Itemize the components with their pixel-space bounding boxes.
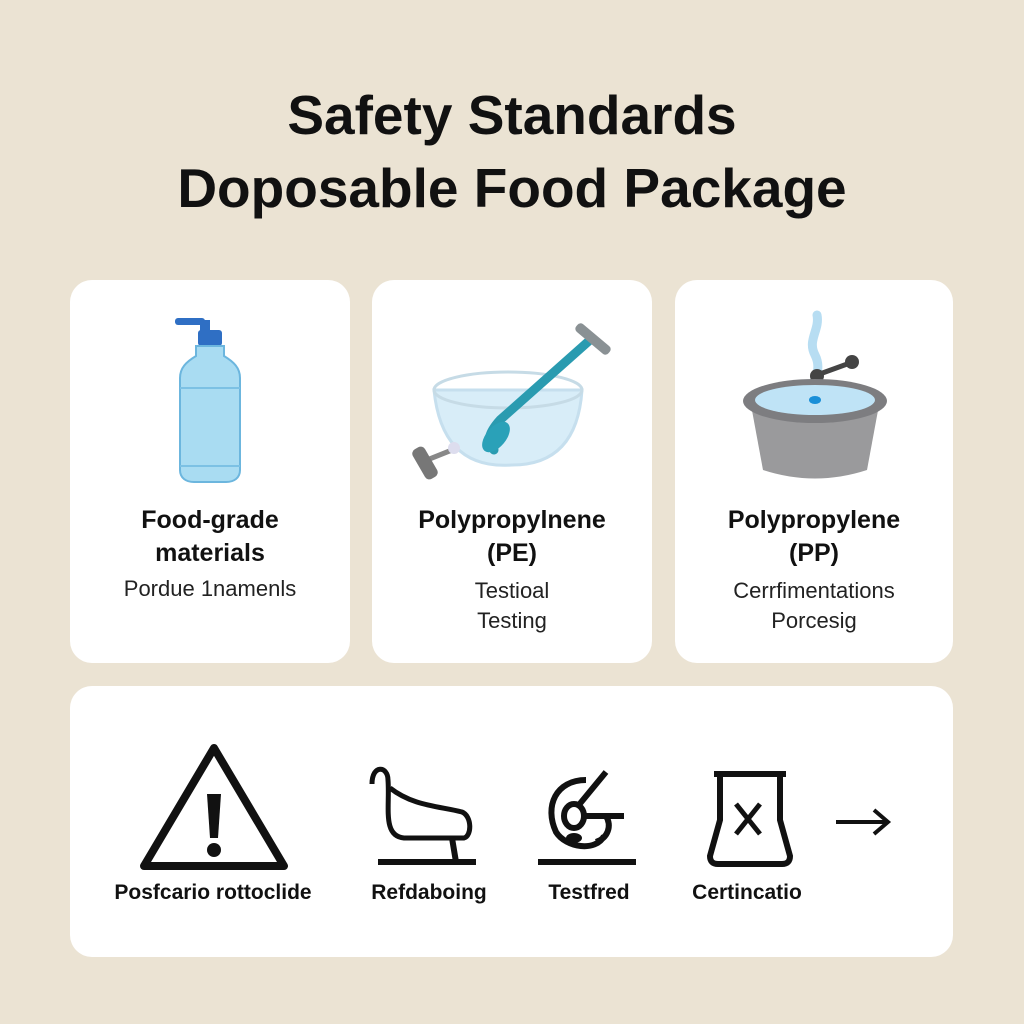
arrow bbox=[836, 808, 891, 836]
text: heading bbox=[728, 506, 900, 567]
text: heading: (PE) bbox=[487, 539, 537, 567]
text: heading bbox=[141, 506, 279, 567]
panel: food-grade materials bbox=[70, 280, 350, 663]
icon: pot with steam bbox=[743, 310, 887, 478]
label: 3: Testfred bbox=[548, 881, 630, 904]
icon: bowl with stirrer bbox=[412, 323, 611, 480]
panel: bottom icons bbox=[70, 686, 953, 957]
text: heading: Polypropylnene bbox=[418, 506, 606, 534]
text: heading: Polypropylene bbox=[728, 506, 900, 534]
title: Doposable Food Package bbox=[177, 157, 847, 219]
panel: PE bbox=[372, 280, 652, 663]
panel: PP bbox=[675, 280, 953, 663]
text: sub bbox=[733, 578, 895, 633]
text: sub: Pordue 1namenls bbox=[124, 576, 296, 601]
text: sub: Porcesig bbox=[771, 608, 857, 633]
title bbox=[177, 84, 847, 219]
icon: disc bbox=[538, 770, 636, 865]
text: heading: (PP) bbox=[789, 539, 839, 567]
icon: chair bbox=[370, 766, 476, 865]
text: sub: Testioal bbox=[475, 578, 549, 603]
label: 2: Refdaboing bbox=[371, 881, 487, 904]
label: 1: Posfcario rottoclide bbox=[114, 881, 312, 904]
text: sub: Cerrfimentations bbox=[733, 578, 895, 603]
text: heading: materials bbox=[155, 539, 265, 567]
text: heading: Food-grade bbox=[141, 506, 279, 534]
text: sub bbox=[475, 578, 549, 633]
icon: bottle bbox=[175, 318, 241, 483]
text: sub: Testing bbox=[477, 608, 547, 633]
icon: beaker bbox=[707, 771, 793, 867]
icon: warning triangle bbox=[140, 744, 288, 870]
label: 4: Certincatio bbox=[692, 881, 802, 904]
text: heading bbox=[418, 506, 606, 567]
title: Safety Standards bbox=[287, 84, 737, 146]
